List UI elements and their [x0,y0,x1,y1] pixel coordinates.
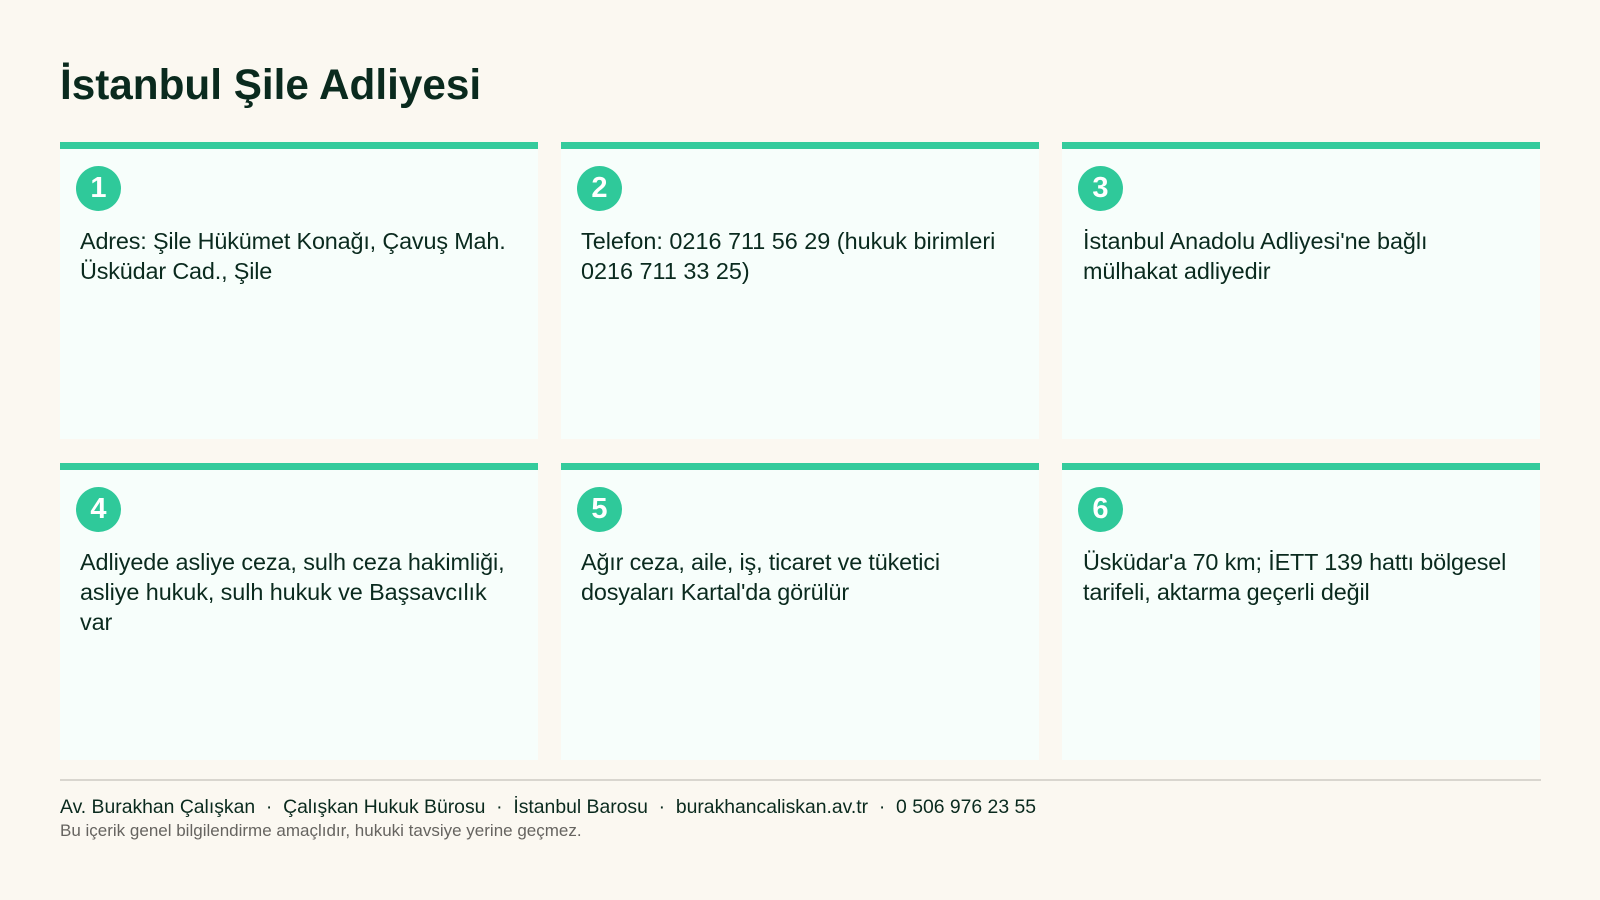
units text: Adliyede asliye ceza, sulh ceza hakimliği, [80,549,505,575]
address text [80,228,506,284]
footer disclaimer: Bu içerik genel bilgilendirme amaçlıdır, hukuki tavsiye yerine geçmez. [60,821,582,840]
units text: var [80,609,112,635]
panel: phone [561,142,1039,439]
number badge 2 [577,166,622,211]
footer contact line: Av. Burakhan Çalışkan · Çalışkan Hukuk Bürosu · İstanbul Barosu · burakhancaliskan.av.tr · 0 506 976 23 55 [60,796,1036,818]
number badge 2: 2 [591,172,608,204]
address text: Üsküdar Cad., Şile [80,258,272,284]
number badge 6: 6 [1092,493,1109,525]
panel: affiliation [1062,142,1540,439]
number badge 4: 4 [90,493,107,525]
panel: transport [1062,463,1540,760]
number badge 5 [577,487,622,532]
panel: Kartal cases [561,463,1039,760]
transport text: tarifeli, aktarma geçerli değil [1083,579,1370,605]
number badge 1 [76,166,121,211]
number badge 4 [76,487,121,532]
phone text: Telefon: 0216 711 56 29 (hukuk birimleri [581,228,995,254]
address text: Adres: Şile Hükümet Konağı, Çavuş Mah. [80,228,506,254]
units text: asliye hukuk, sulh hukuk ve Başsavcılık [80,579,487,605]
phone text: 0216 711 33 25) [581,258,750,284]
number badge 1: 1 [90,172,107,204]
affiliation text [1083,228,1427,284]
affiliation text: İstanbul Anadolu Adliyesi'ne bağlı [1083,228,1427,254]
Kartal cases text: Ağır ceza, aile, iş, ticaret ve tüketici [581,549,940,575]
panel: units [60,463,538,760]
phone text [581,228,995,284]
number badge 6 [1078,487,1123,532]
affiliation text: mülhakat adliyedir [1083,258,1270,284]
number badge 3: 3 [1092,172,1109,204]
Kartal cases text [581,549,940,605]
number badge 3 [1078,166,1123,211]
number badge 5: 5 [591,493,608,525]
transport text [1083,549,1506,605]
transport text: Üsküdar'a 70 km; İETT 139 hattı bölgesel [1083,549,1506,575]
panel: address [60,142,538,439]
Kartal cases text: dosyaları Kartal'da görülür [581,579,849,605]
units text [80,549,505,635]
title: İstanbul Şile Adliyesi [60,61,481,108]
